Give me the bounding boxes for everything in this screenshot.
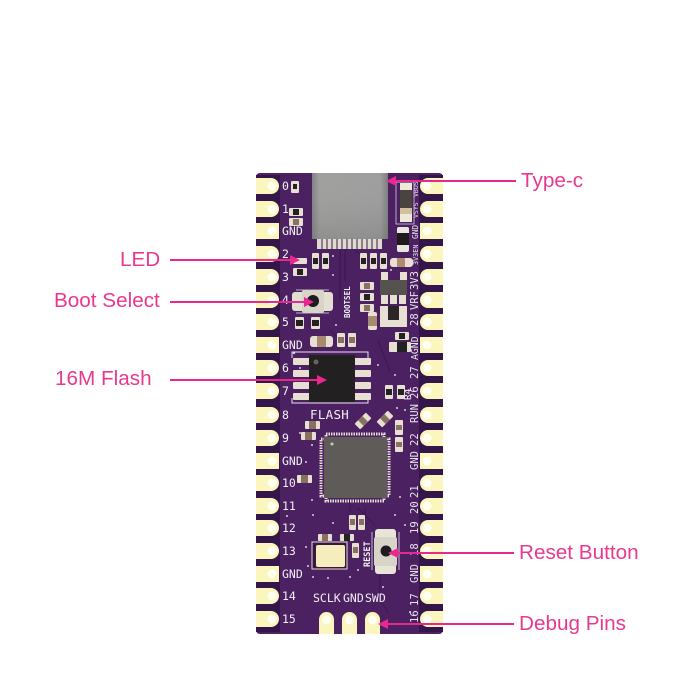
debug pin labels: SWD (365, 591, 386, 605)
label: 16M Flash: 16M Flash (55, 367, 152, 390)
inductor (380, 306, 407, 327)
right pin labels: VRF (409, 291, 421, 310)
top right power components (390, 182, 414, 267)
arrow: LED (170, 255, 300, 265)
label: Boot Select: Boot Select (54, 289, 160, 312)
left pin labels: 6 (282, 361, 289, 375)
voltage regulator (380, 272, 407, 304)
label: Debug Pins: Debug Pins (519, 612, 626, 635)
left pin labels: 8 (282, 408, 289, 422)
right pin labels: VBUS (412, 181, 420, 197)
left pin labels: 15 (282, 612, 296, 626)
debug pins (319, 612, 380, 634)
arrow: Boot Select (170, 297, 314, 307)
right pin labels: VSYS (412, 202, 420, 218)
flash label: FLASH (310, 407, 349, 422)
left edge pins (256, 178, 279, 627)
left pin labels (282, 179, 303, 626)
right pin labels: 16 (409, 610, 421, 623)
label: Boot Select (54, 289, 314, 312)
debug pin labels (313, 591, 386, 605)
right pin labels: RUN (409, 404, 421, 423)
label: Type-c (386, 169, 583, 192)
debug pin labels: SCLK (313, 591, 341, 605)
right pin labels: 20 (409, 501, 421, 514)
right pin labels: 18 (409, 543, 421, 556)
left pin labels: 4 (282, 293, 289, 307)
reset label: RESET (363, 541, 373, 567)
left pin labels: 9 (282, 431, 289, 445)
right pin labels (409, 181, 421, 623)
right pin labels: GND (409, 451, 421, 470)
vias and traces (286, 248, 411, 613)
bootsel label: BOOTSEL (343, 286, 352, 318)
arrow: Type-c (386, 176, 516, 186)
usb type-c connector (312, 173, 388, 249)
left pin labels: 11 (282, 499, 296, 513)
right pin labels: 3V3 (409, 271, 421, 290)
R4 label: R4 (403, 388, 414, 400)
left pin labels: 10 (282, 476, 296, 490)
left pin labels: 3 (282, 270, 289, 284)
label: Reset Button: Reset Button (519, 541, 639, 564)
right pin labels: GND (409, 564, 421, 583)
label: Reset Button (388, 541, 639, 564)
right pin labels: GND (411, 225, 420, 239)
left pin labels: GND (282, 567, 303, 581)
left pin labels: 7 (282, 384, 289, 398)
right pin labels: 28 (409, 313, 421, 326)
right pin labels: 21 (409, 485, 421, 498)
label: LED: LED (120, 248, 160, 271)
left pin labels: 14 (282, 589, 296, 603)
right pin labels: 19 (409, 521, 421, 534)
right pin labels: 22 (409, 433, 421, 446)
boot select button (292, 290, 333, 313)
label: Debug Pins (378, 612, 626, 635)
reset button (372, 529, 399, 574)
small smd components (289, 181, 411, 558)
arrow: Debug Pins (378, 619, 514, 629)
label: LED (120, 248, 300, 271)
left pin labels: 0 (282, 179, 289, 193)
left pin labels: 1 (282, 202, 289, 216)
microcontroller chip (321, 434, 389, 501)
crystal oscillator (312, 542, 347, 569)
right pin labels: 26 (409, 386, 421, 399)
left pin labels: 13 (282, 544, 296, 558)
right pin labels: 27 (409, 366, 421, 379)
label: 16M Flash (55, 367, 327, 390)
right edge pins (420, 178, 443, 627)
flash chip (292, 352, 371, 422)
left pin labels: GND (282, 338, 303, 352)
right pin labels: 3V3EN (412, 245, 420, 265)
arrow: Reset Button (388, 548, 514, 558)
left pin labels: 12 (282, 521, 296, 535)
panel: circuit board (256, 173, 443, 634)
right pin labels: 17 (409, 593, 421, 606)
left pin labels: 2 (282, 247, 289, 261)
left pin labels: 5 (282, 315, 289, 329)
arrow: 16M Flash (170, 375, 327, 385)
left pin labels: GND (282, 454, 303, 468)
label: Type-c: Type-c (521, 169, 583, 192)
debug pin labels: GND (343, 591, 364, 605)
right pin labels: AGND (410, 336, 421, 360)
left pin labels: GND (282, 224, 303, 238)
